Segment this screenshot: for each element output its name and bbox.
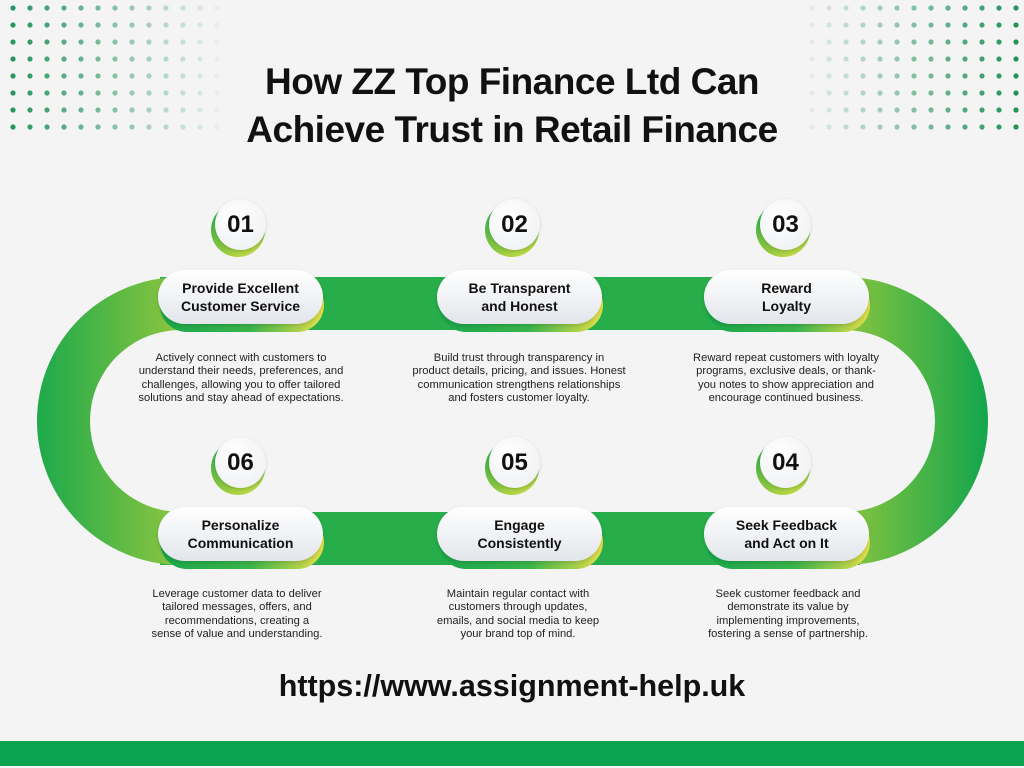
pill 06	[157, 507, 324, 569]
description 03: encourage continued business.	[709, 392, 863, 404]
pill 05: Consistently	[477, 535, 562, 551]
description 06: recommendations, creating a	[165, 615, 309, 627]
step 04 number	[756, 442, 812, 495]
pill 01: Customer Service	[181, 298, 300, 314]
description 01: understand their needs, preferences, and	[139, 365, 343, 377]
description 06	[151, 588, 323, 640]
title: How ZZ Top Finance Ltd Can	[265, 61, 759, 102]
description 01: challenges, allowing you to offer tailored	[142, 379, 340, 391]
description 01: Actively connect with customers to	[156, 352, 326, 364]
step 06 number	[211, 442, 267, 495]
description 02: product details, pricing, and issues. Honest	[412, 365, 626, 377]
description 04	[708, 588, 868, 640]
description 06: sense of value and understanding.	[151, 628, 323, 640]
pill 06: Personalize	[202, 517, 279, 533]
description 03	[693, 352, 879, 404]
description 03: programs, exclusive deals, or thank-	[696, 365, 876, 377]
description 04: demonstrate its value by	[727, 601, 849, 613]
description 04: implementing improvements,	[716, 615, 860, 627]
description 01: solutions and stay ahead of expectations.	[138, 392, 344, 404]
pill 03: Loyalty	[762, 298, 811, 314]
bottom green bar	[0, 741, 1024, 766]
pill 04	[703, 507, 870, 569]
decorative dots	[10, 5, 1019, 130]
description 01	[138, 352, 344, 404]
pill 05: Engage	[494, 517, 545, 533]
title	[246, 61, 778, 150]
pill 04: and Act on It	[744, 535, 829, 551]
step 02 number	[485, 204, 541, 257]
step 04 number: 04	[772, 448, 799, 476]
step 03 number: 03	[772, 210, 799, 238]
description 04: fostering a sense of partnership.	[708, 628, 868, 640]
step 01 number: 01	[227, 210, 254, 238]
pill 03	[703, 270, 870, 332]
description 05: your brand top of mind.	[460, 628, 576, 640]
description 05: Maintain regular contact with	[447, 588, 589, 600]
pill 06: Communication	[188, 535, 293, 551]
step 03 number	[756, 204, 812, 257]
description 03: you notes to show appreciation and	[698, 379, 874, 391]
pill 01	[157, 270, 324, 332]
pill 02	[436, 270, 603, 332]
title: Achieve Trust in Retail Finance	[246, 109, 778, 150]
description 02: Build trust through transparency in	[434, 352, 604, 364]
step 02 number: 02	[501, 210, 528, 238]
step 01 number	[211, 204, 267, 257]
step 05 number	[485, 442, 541, 495]
description 02	[412, 352, 626, 404]
description 05: emails, and social media to keep	[437, 615, 599, 627]
pill 02: Be Transparent	[469, 280, 570, 296]
description 05	[437, 588, 599, 640]
pill 05	[436, 507, 603, 569]
pill 04: Seek Feedback	[736, 517, 837, 533]
description 03: Reward repeat customers with loyalty	[693, 352, 879, 364]
description 05: customers through updates,	[449, 601, 587, 613]
step 05 number: 05	[501, 448, 528, 476]
pill 02: and Honest	[481, 298, 558, 314]
website url: https://www.assignment-help.uk	[279, 669, 745, 703]
pill 03: Reward	[761, 280, 812, 296]
pill 01: Provide Excellent	[182, 280, 299, 296]
description 06: tailored messages, offers, and	[162, 601, 312, 613]
description 04: Seek customer feedback and	[716, 588, 860, 600]
step 06 number: 06	[227, 448, 254, 476]
description 02: and fosters customer loyalty.	[448, 392, 590, 404]
description 02: communication strengthens relationships	[418, 379, 620, 391]
description 06: Leverage customer data to deliver	[152, 588, 322, 600]
